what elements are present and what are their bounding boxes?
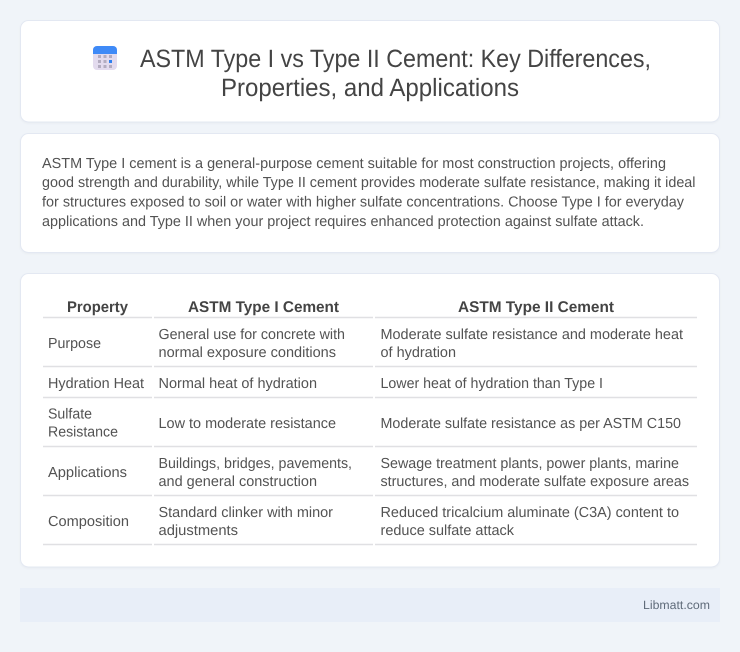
summary text: applications and Type II when your project requires enhanced protection against sulfate attack. — [42, 214, 644, 230]
footer bar: Libmatt.com — [643, 598, 710, 612]
table row: Hydration Heat: Hydration Heat — [48, 376, 144, 392]
summary text: for structures exposed to soil or water with higher sulfate concentrations. Choose Type I for everyday — [42, 194, 685, 210]
icon: calendar — [93, 46, 117, 70]
table header row: Property — [67, 299, 128, 316]
table row: Applications: Applications — [48, 465, 127, 481]
table row: Purpose: General use for concrete with — [158, 327, 345, 343]
table row: Purpose: Purpose — [48, 336, 101, 352]
table row: Sulfate Resistance: Moderate sulfate resistance as per ASTM C150 — [380, 416, 681, 432]
table row: Applications: structures, and moderate sulfate exposure areas — [380, 474, 689, 490]
table row: Sulfate Resistance — [43, 406, 697, 446]
table row: Purpose: of hydration — [380, 345, 456, 361]
panel: title header — [20, 20, 720, 122]
summary text: ASTM Type I cement is a general-purpose cement suitable for most construction projects, offering — [42, 156, 666, 172]
table row: Composition: reduce sulfate attack — [380, 523, 515, 539]
table row: Hydration Heat: Normal heat of hydration — [158, 376, 317, 392]
table row: Purpose: Moderate sulfate resistance and moderate heat — [380, 327, 683, 343]
table header row — [43, 299, 697, 318]
table row: Composition: Reduced tricalcium aluminate (C3A) content to — [380, 505, 679, 521]
table row: Purpose: normal exposure conditions — [158, 345, 336, 361]
panel: summary paragraph — [20, 134, 720, 252]
table row: Applications: Sewage treatment plants, power plants, marine — [380, 456, 679, 472]
table row: Composition — [43, 505, 697, 544]
summary text — [42, 156, 696, 230]
table row: Sulfate Resistance: Sulfate — [48, 406, 92, 422]
table row: Purpose — [43, 327, 697, 366]
table row: Sulfate Resistance: Low to moderate resistance — [158, 416, 336, 432]
table row: Hydration Heat: Lower heat of hydration than Type I — [380, 376, 603, 392]
table row: Composition: Standard clinker with minor — [158, 505, 333, 521]
table row: Composition: Composition — [48, 514, 129, 530]
title: Properties, and Applications — [221, 74, 519, 102]
title — [140, 45, 651, 102]
table row: Applications: and general construction — [158, 474, 317, 490]
table row: Applications: Buildings, bridges, pavements, — [158, 456, 352, 472]
panel: comparison table — [20, 274, 720, 567]
table row: Hydration Heat — [43, 376, 697, 398]
title: ASTM Type I vs Type II Cement: Key Differences, — [140, 45, 651, 73]
table row: Composition: adjustments — [158, 523, 238, 539]
summary text: good strength and durability, while Type II cement provides moderate sulfate resistance, making it ideal — [42, 175, 696, 191]
table header row: ASTM Type II Cement — [458, 299, 614, 316]
table row: Sulfate Resistance: Resistance — [48, 424, 118, 440]
table row: Applications — [43, 456, 697, 496]
footer bar — [20, 588, 720, 622]
table header row: ASTM Type I Cement — [188, 299, 339, 316]
